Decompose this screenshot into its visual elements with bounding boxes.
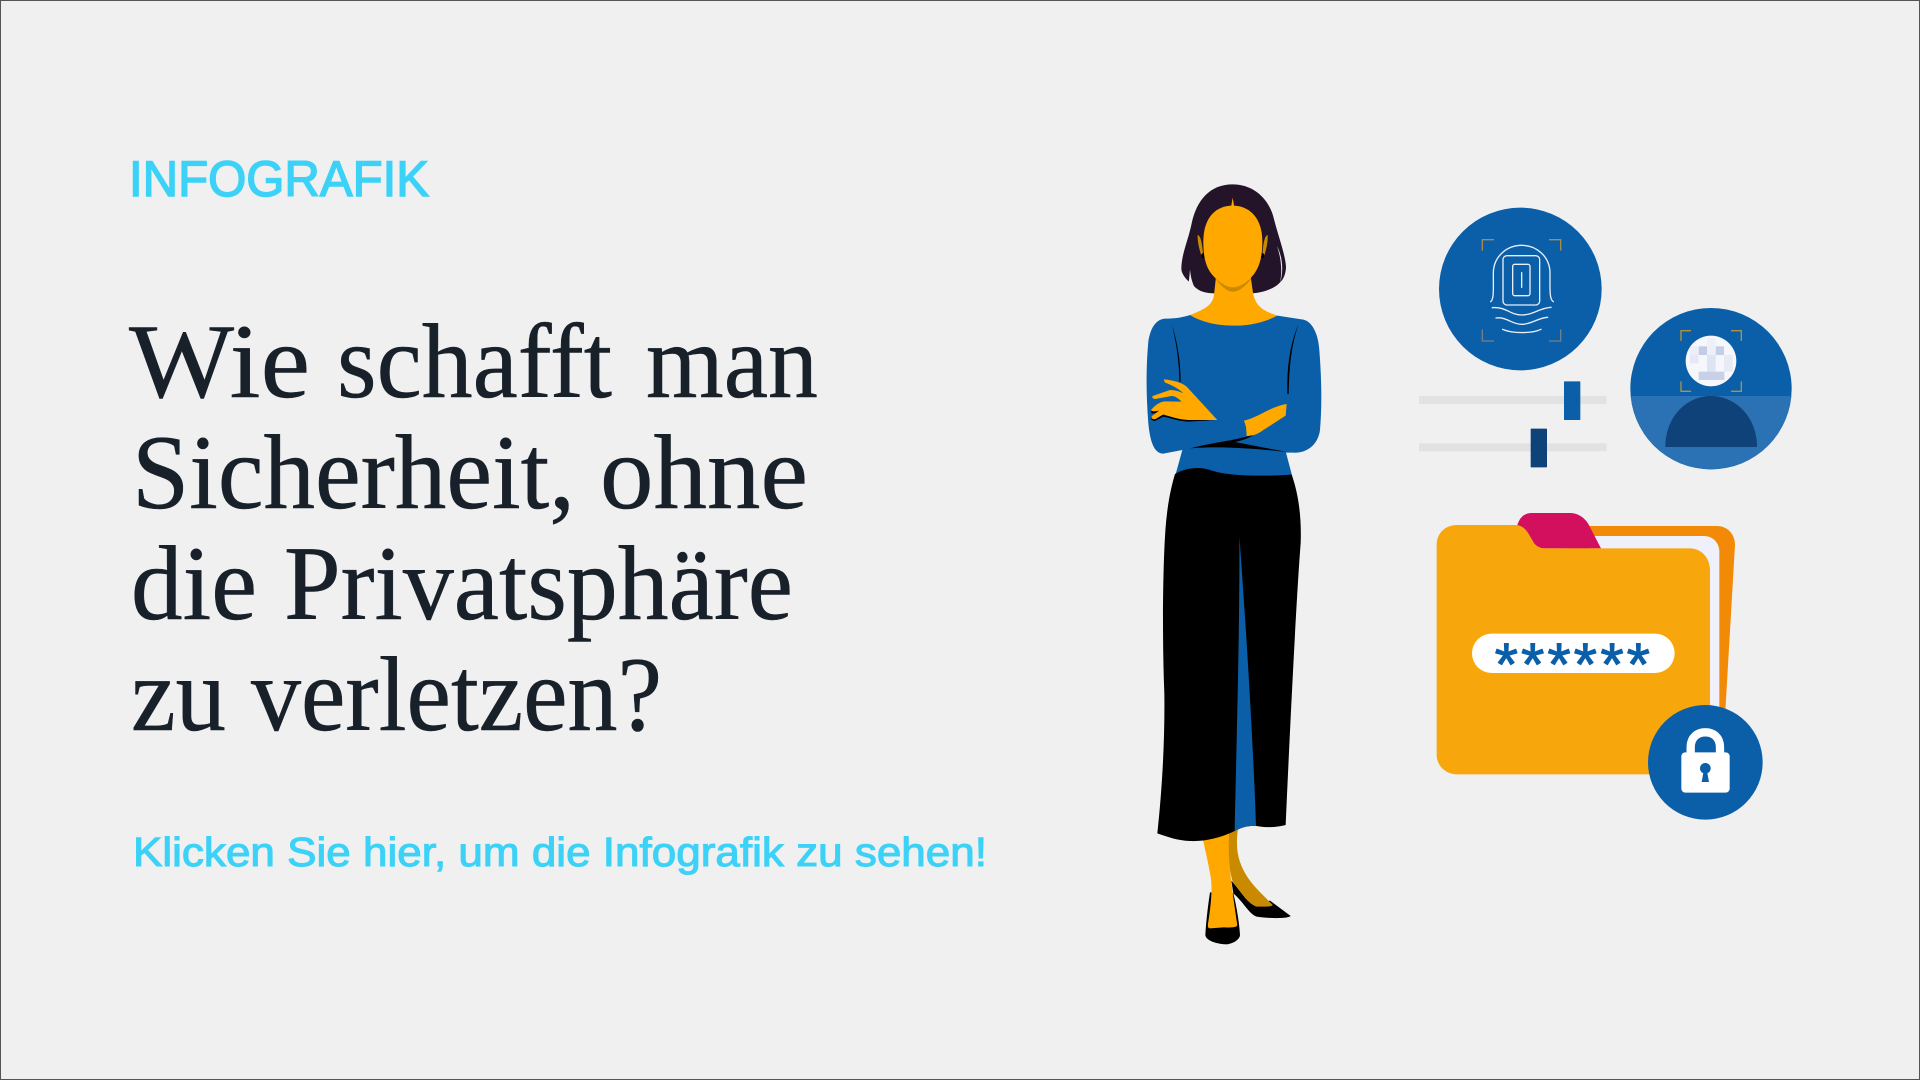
ears [1198, 235, 1268, 257]
trouser blue pleat [1235, 537, 1256, 831]
paper sheet [1590, 536, 1719, 717]
crossed arm fold [1190, 435, 1287, 452]
title: Sicherheit, [132, 414, 575, 531]
title: Privatsphäre [284, 525, 793, 642]
hair [1181, 184, 1286, 293]
eyebrow label: INFOGRAFIK [129, 151, 429, 207]
front leg [1203, 832, 1237, 928]
illustration: password folder [1437, 513, 1763, 820]
title: verletzen? [251, 636, 662, 753]
slider: top [1419, 381, 1607, 420]
front shoe [1205, 892, 1240, 944]
face [1203, 206, 1262, 287]
icon: fingerprint circle [1439, 208, 1602, 370]
folder front [1437, 525, 1710, 774]
back leg [1228, 828, 1273, 907]
title: man [646, 303, 818, 420]
trousers [1157, 468, 1301, 841]
title: die [131, 525, 257, 642]
slider: bottom [1419, 429, 1607, 467]
illustration: biometric and slider icons [1419, 208, 1793, 471]
neck [1188, 277, 1278, 337]
illustration: standing woman [1147, 184, 1321, 944]
sweater [1147, 315, 1321, 477]
woman upper body [1147, 184, 1321, 477]
chin shadow [1216, 273, 1251, 292]
title: ohne [600, 414, 808, 531]
title [129, 303, 818, 753]
sleeve fold lines [1172, 324, 1299, 394]
left hand [1151, 379, 1217, 420]
woman lower body [1157, 468, 1301, 944]
password field: ****** [1495, 631, 1650, 698]
pink tab [1517, 513, 1601, 548]
title: Wie [129, 303, 310, 420]
folder back [1567, 526, 1735, 717]
icon: pixelated face scan [1630, 308, 1793, 471]
hand shadow [1151, 410, 1217, 422]
call to action: Klicken Sie hier, um die Infografik zu sehen! [133, 829, 987, 875]
right hand [1244, 404, 1287, 436]
back shoe [1231, 881, 1291, 918]
hair parting [1231, 198, 1234, 207]
earrings [1201, 253, 1264, 258]
title: zu [131, 636, 226, 753]
title: schafft [337, 303, 612, 420]
hair highlights [1189, 246, 1282, 286]
icon: padlock [1648, 705, 1763, 820]
